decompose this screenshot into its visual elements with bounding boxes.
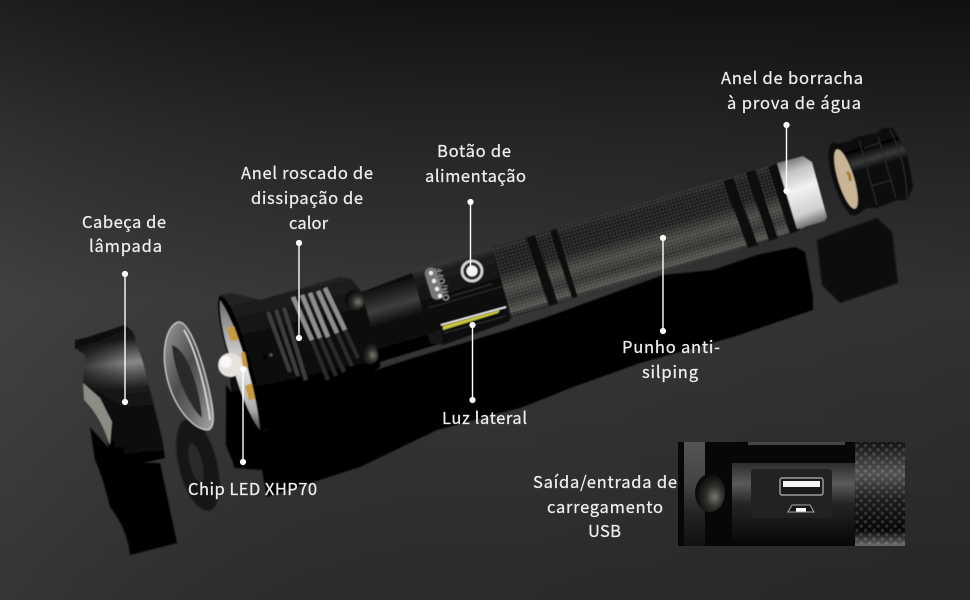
label: anti-slip grip: Punho anti-	[622, 334, 720, 358]
anti-slip grip	[556, 180, 747, 297]
label: anti-slip grip: silping	[642, 359, 699, 383]
label: threaded heat ring: dissipação de	[251, 185, 363, 209]
inset port panel	[751, 469, 832, 518]
label: USB charging port: Saída/entrada de	[533, 469, 677, 493]
inset: USB port close-up	[678, 442, 905, 546]
label: lamp head: Cabeça de	[82, 209, 166, 233]
inset side button	[695, 474, 725, 512]
label: side light: Luz lateral	[442, 405, 527, 429]
power indicator and button: ON/OFF	[431, 266, 453, 303]
knurled collar	[492, 228, 581, 319]
label: threaded heat ring: calor	[289, 210, 329, 234]
rear rings	[720, 163, 804, 248]
lens	[164, 322, 213, 430]
rubber waterproof ring	[777, 156, 827, 229]
tail cap	[822, 128, 913, 219]
flashlight	[75, 128, 913, 467]
lamp head bezel	[75, 325, 165, 467]
reflections on the floor	[90, 218, 898, 555]
label: waterproof rubber ring: à prova de água	[727, 90, 861, 114]
neck and switch housing	[362, 247, 513, 362]
label: waterproof rubber ring: Anel de borracha	[721, 65, 863, 89]
label: power button: Botão de	[437, 138, 511, 162]
micro USB port	[788, 505, 814, 512]
label: LED chip: Chip LED XHP70	[188, 476, 317, 500]
label: lamp head: lâmpada	[89, 233, 162, 257]
inset knurl	[855, 442, 905, 546]
label: power button: alimentação	[425, 163, 526, 187]
label: USB charging port: carregamento	[547, 494, 663, 518]
callout lines	[123, 123, 789, 464]
USB-A port	[780, 478, 823, 495]
power indicator and button	[423, 261, 482, 303]
label: USB charging port: USB	[588, 518, 621, 542]
heat dissipation head with threaded fins	[218, 277, 380, 433]
side light	[441, 307, 510, 345]
label: threaded heat ring: Anel roscado de	[241, 160, 373, 184]
